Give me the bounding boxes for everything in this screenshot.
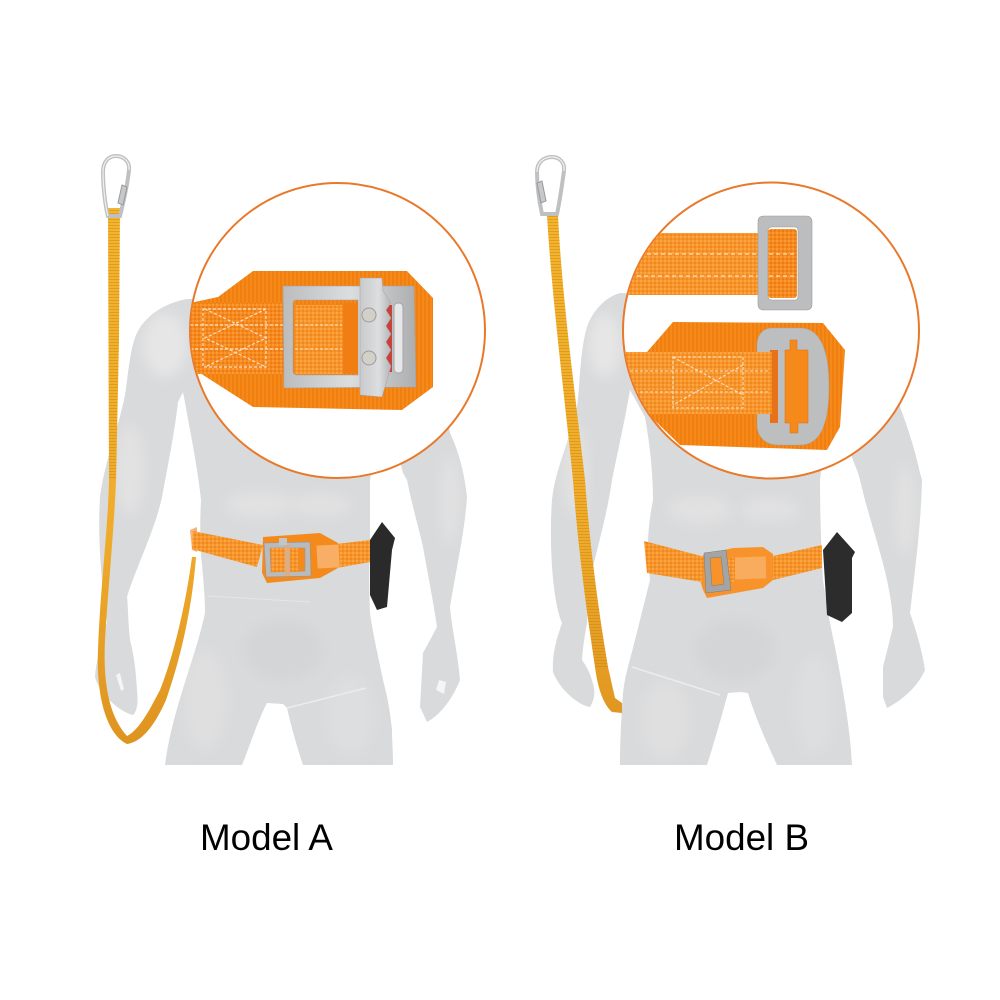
label: Model A: Model A — [200, 817, 333, 858]
callout: model A buckle detail — [188, 183, 485, 478]
buckle B — [704, 550, 731, 593]
circle A — [190, 183, 485, 478]
lower stitching B — [630, 357, 770, 408]
rivets A — [362, 308, 376, 322]
buckle slots B — [770, 350, 778, 423]
lower strap B — [622, 352, 772, 414]
belt B — [644, 541, 822, 598]
lanyard strap B — [547, 215, 622, 713]
lever A — [360, 278, 403, 397]
panel: model A figure — [95, 156, 467, 765]
pouch A — [370, 522, 395, 610]
panel: model B figure — [537, 157, 925, 765]
carabiner A — [103, 156, 129, 216]
carabiner B — [537, 157, 564, 214]
callout: model B buckle detail — [620, 182, 919, 478]
D buckle B — [757, 328, 829, 445]
upper strap B — [620, 233, 760, 295]
webbing pad A — [190, 271, 433, 410]
strap through buckle A — [295, 305, 343, 374]
buckle frame A — [283, 286, 416, 388]
strap A — [190, 303, 284, 374]
stitching A — [190, 308, 283, 368]
slider B — [758, 216, 812, 310]
pouch B — [823, 532, 855, 622]
upper stitching B — [634, 253, 758, 277]
mannequin B — [551, 293, 925, 765]
label: Model B: Model B — [674, 817, 809, 858]
lower pad B — [647, 322, 845, 450]
circle B — [623, 182, 919, 478]
mannequin A — [95, 299, 467, 765]
buckle A — [264, 538, 311, 577]
lanyard strap A — [98, 208, 196, 744]
belt A — [190, 527, 370, 583]
